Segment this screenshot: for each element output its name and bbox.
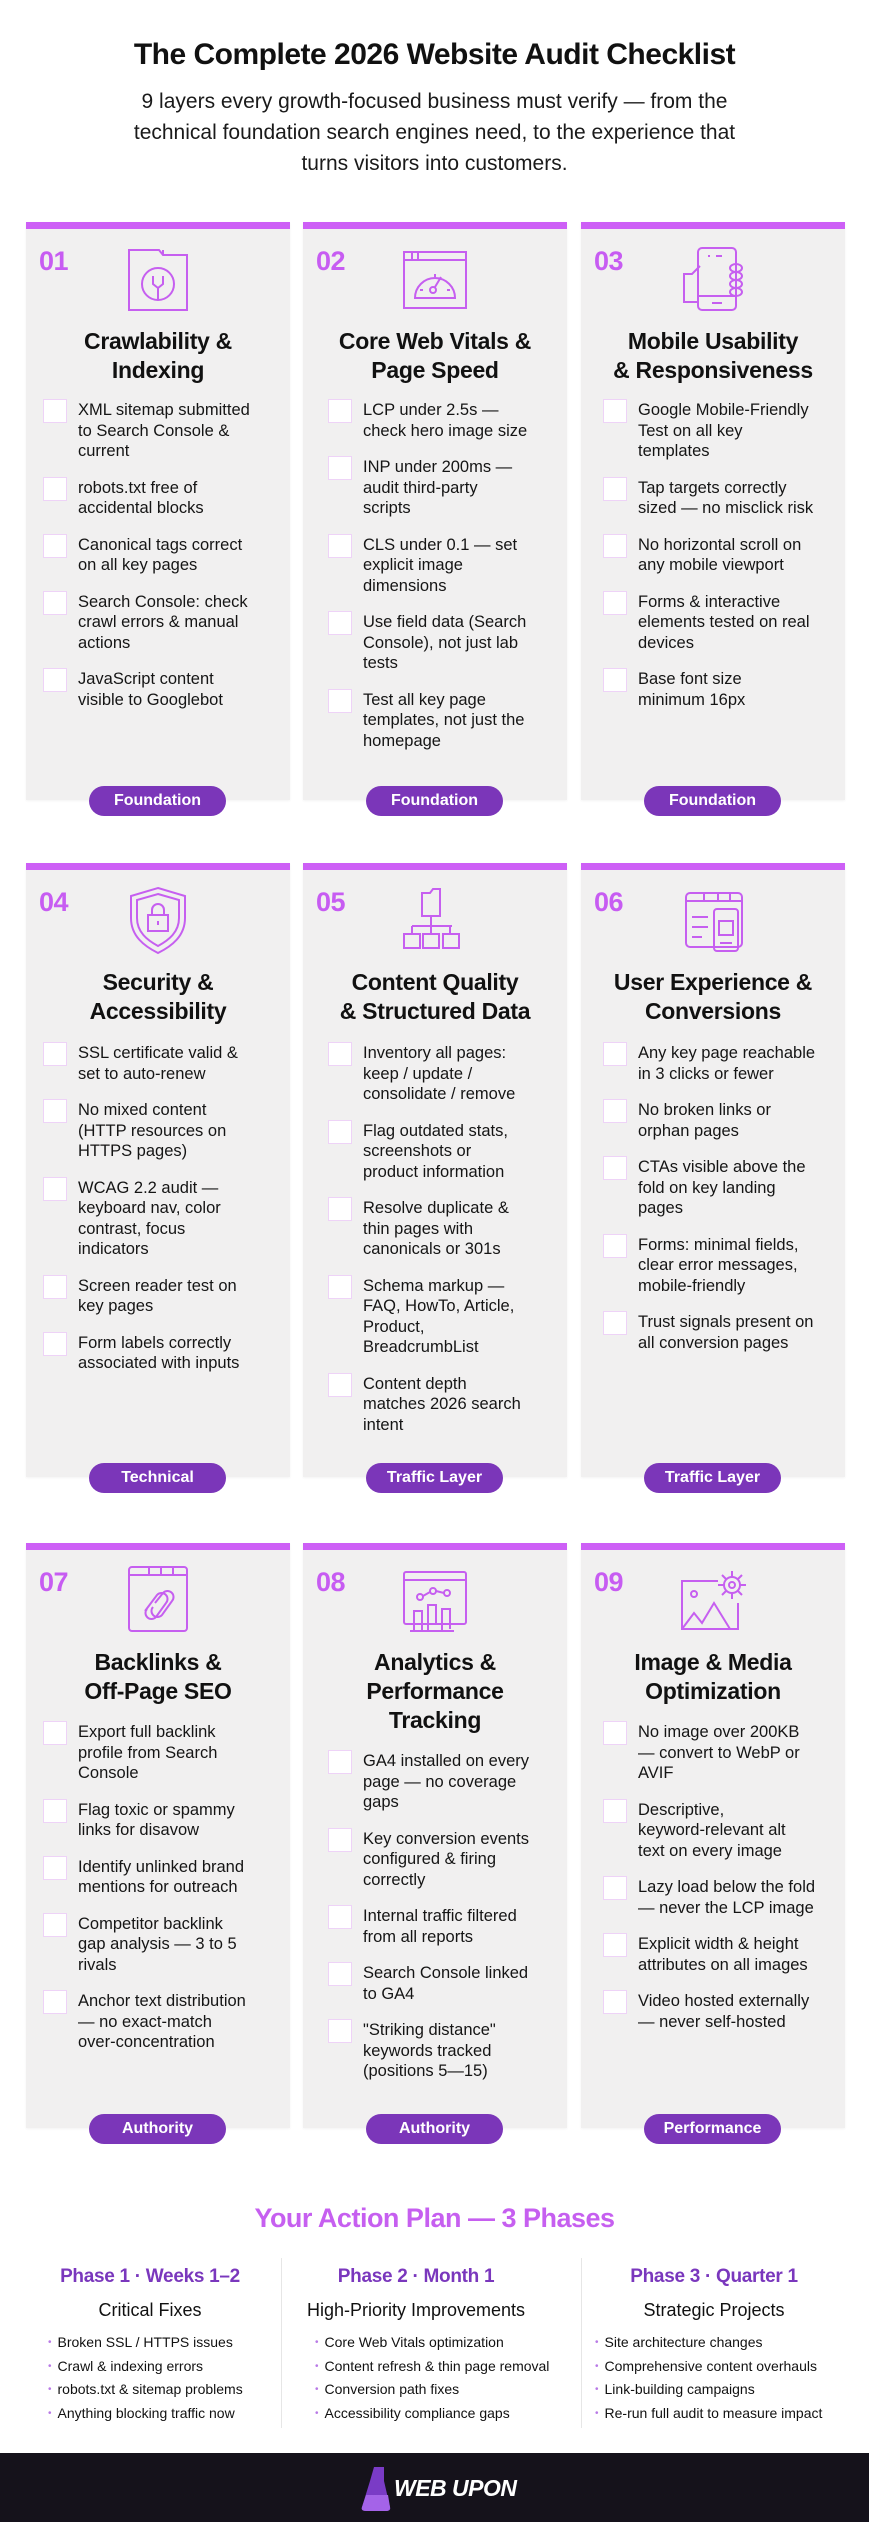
checklist: Console), not just lab xyxy=(363,634,518,652)
badge: Technical xyxy=(121,1469,194,1486)
checklist: associated with inputs xyxy=(78,1354,239,1372)
checklist: accidental blocks xyxy=(78,499,204,517)
checklist: links for disavow xyxy=(78,1821,199,1839)
subtitle: technical foundation search engines need, to the experience that xyxy=(134,121,735,144)
checklist: audit third-party xyxy=(363,478,478,496)
checklist: scripts xyxy=(363,499,411,517)
checklist: devices xyxy=(638,634,694,652)
checklist: LCP under 2.5s — xyxy=(363,401,498,419)
checklist xyxy=(328,1750,529,2080)
checklist: AVIF xyxy=(638,1764,673,1782)
heading: & Responsiveness xyxy=(613,357,813,383)
phase 3: Strategic Projects xyxy=(643,2300,785,2320)
checklist: Key conversion events xyxy=(363,1830,529,1848)
checklist: Tap targets correctly xyxy=(638,478,787,496)
checklist xyxy=(603,399,814,708)
heading: Image & Media xyxy=(634,1649,792,1675)
checklist xyxy=(603,1721,815,2030)
checklist: Lazy load below the fold xyxy=(638,1878,815,1896)
phase 2 bullets: • Conversion path fixes xyxy=(315,2381,459,2397)
heading xyxy=(84,328,232,383)
badge: Foundation xyxy=(669,792,756,809)
icon: image gear xyxy=(681,1571,746,1630)
phase 2 bullets xyxy=(315,2334,549,2421)
panel: 05 content xyxy=(303,863,567,1477)
checklist: dimensions xyxy=(363,576,446,594)
panel: 04 security xyxy=(26,863,290,1477)
checklist: key pages xyxy=(78,1297,153,1315)
checklist: attributes on all images xyxy=(638,1956,808,1974)
phase 3 bullets xyxy=(595,2334,822,2421)
checklist: CLS under 0.1 — set xyxy=(363,536,517,554)
panel: 01 crawlability xyxy=(26,222,290,800)
checklist xyxy=(603,1042,815,1352)
checklist: rivals xyxy=(78,1956,117,1974)
checklist: screenshots or xyxy=(363,1142,471,1160)
phase 3 bullets: • Comprehensive content overhauls xyxy=(595,2358,817,2374)
badge: Foundation xyxy=(114,792,201,809)
checklist: Trust signals present on xyxy=(638,1313,813,1331)
heading xyxy=(84,1649,232,1704)
checklist: page — no coverage xyxy=(363,1772,516,1790)
checklist: GA4 installed on every xyxy=(363,1752,529,1770)
checklist: Schema markup — xyxy=(363,1276,504,1294)
checklist: intent xyxy=(363,1416,403,1434)
checklist: Flag outdated stats, xyxy=(363,1122,508,1140)
title: The Complete 2026 Website Audit Checklist xyxy=(134,38,735,71)
checklist: elements tested on real xyxy=(638,613,810,631)
checklist: Search Console linked xyxy=(363,1964,528,1982)
subtitle: turns visitors into customers. xyxy=(301,152,568,175)
heading xyxy=(340,969,531,1024)
heading: Accessibility xyxy=(90,998,226,1024)
panel: 01 crawlability: 01 xyxy=(39,246,68,276)
checklist: Inventory all pages: xyxy=(363,1044,506,1062)
checklist: Use field data (Search xyxy=(363,613,526,631)
phase 2: Phase 2 · Month 1 xyxy=(338,2266,494,2287)
heading: Analytics & xyxy=(374,1649,496,1675)
checklist: Any key page reachable xyxy=(638,1044,815,1062)
checklist: (HTTP resources on xyxy=(78,1122,226,1140)
checklist: XML sitemap submitted xyxy=(78,401,250,419)
checklist: Resolve duplicate & xyxy=(363,1199,509,1217)
heading: Off-Page SEO xyxy=(84,1678,232,1704)
phase 3 bullets: • Link-building campaigns xyxy=(595,2381,755,2397)
phase 2 xyxy=(307,2266,525,2320)
badge xyxy=(644,786,781,816)
checklist: Search Console: check xyxy=(78,592,248,610)
checklist: set to auto-renew xyxy=(78,1064,206,1082)
heading: Performance xyxy=(366,1678,504,1704)
heading: Security & xyxy=(103,969,213,995)
checklist: keywords tracked xyxy=(363,2042,491,2060)
phase 2 bullets: • Accessibility compliance gaps xyxy=(315,2405,510,2421)
checklist: fold on key landing xyxy=(638,1178,776,1196)
checklist: No mixed content xyxy=(78,1101,206,1119)
checklist: to GA4 xyxy=(363,1984,414,2002)
icon: shield lock xyxy=(130,887,186,954)
checklist: Forms & interactive xyxy=(638,592,780,610)
icon: sitemap xyxy=(403,888,460,949)
checklist: "Striking distance" xyxy=(363,2021,496,2039)
phase 2 bullets: • Core Web Vitals optimization xyxy=(315,2334,504,2350)
checklist: No image over 200KB xyxy=(638,1723,799,1741)
checklist: Video hosted externally xyxy=(638,1992,809,2010)
checklist: sized — no misclick risk xyxy=(638,499,813,517)
checklist: matches 2026 search xyxy=(363,1395,521,1413)
action plan heading: Your Action Plan — 3 Phases xyxy=(254,2203,615,2233)
checklist: configured & firing xyxy=(363,1850,496,1868)
phase 2 bullets: • Content refresh & thin page removal xyxy=(315,2358,549,2374)
icon: folder gear xyxy=(128,249,188,311)
checklist: keyboard nav, color xyxy=(78,1199,221,1217)
panel: 08 analytics: 08 xyxy=(316,1567,345,1597)
badge xyxy=(366,1463,503,1493)
icon: responsive screens xyxy=(685,892,743,952)
heading xyxy=(339,328,531,383)
checklist: current xyxy=(78,442,129,460)
checklist: Flag toxic or spammy xyxy=(78,1800,235,1818)
checklist: Descriptive, xyxy=(638,1800,724,1818)
heading xyxy=(90,969,226,1024)
phase 3: Phase 3 · Quarter 1 xyxy=(630,2266,798,2287)
phase 1: Phase 1 · Weeks 1–2 xyxy=(60,2266,240,2287)
checklist: INP under 200ms — xyxy=(363,458,512,476)
checklist: homepage xyxy=(363,732,441,750)
badge xyxy=(366,2114,503,2144)
heading: Backlinks & xyxy=(94,1649,222,1675)
checklist: keyword-relevant alt xyxy=(638,1821,786,1839)
checklist: visible to Googlebot xyxy=(78,690,223,708)
heading xyxy=(613,328,813,383)
heading: Tracking xyxy=(389,1707,481,1733)
checklist: Google Mobile-Friendly xyxy=(638,401,809,419)
checklist: canonicals or 301s xyxy=(363,1240,501,1258)
checklist: — no exact-match xyxy=(78,2012,212,2030)
badge: Traffic Layer xyxy=(387,1469,482,1486)
checklist: templates, not just the xyxy=(363,711,524,729)
checklist: tests xyxy=(363,654,398,672)
checklist: Internal traffic filtered xyxy=(363,1907,517,1925)
checklist: indicators xyxy=(78,1240,149,1258)
checklist: crawl errors & manual xyxy=(78,613,238,631)
panel: 07 backlinks xyxy=(26,1543,290,2128)
checklist: Test all key page xyxy=(363,690,486,708)
checklist: all conversion pages xyxy=(638,1334,788,1352)
checklist: from all reports xyxy=(363,1928,473,1946)
checklist: minimum 16px xyxy=(638,690,745,708)
checklist: actions xyxy=(78,634,130,652)
icon: phone in hand xyxy=(683,247,743,311)
phase 1 bullets: • Anything blocking traffic now xyxy=(48,2405,235,2421)
checklist: gap analysis — 3 to 5 xyxy=(78,1935,237,1953)
phase 2: High-Priority Improvements xyxy=(307,2300,525,2320)
panel: 08 analytics xyxy=(303,1543,567,2128)
checklist: contrast, focus xyxy=(78,1220,185,1238)
phase 1 xyxy=(60,2266,240,2320)
checklist xyxy=(43,1721,246,2051)
checklist: Console xyxy=(78,1764,139,1782)
badge xyxy=(89,2114,226,2144)
panel: 04 security: 04 xyxy=(39,887,68,917)
panel: 03 mobile: 03 xyxy=(594,246,623,276)
footer xyxy=(0,2453,869,2522)
checklist: to Search Console & xyxy=(78,422,229,440)
heading xyxy=(366,1649,504,1733)
phase 1 bullets xyxy=(48,2334,243,2421)
phase 1: Critical Fixes xyxy=(98,2300,202,2320)
badge xyxy=(366,786,503,816)
panel: 09 image media xyxy=(581,1543,845,2128)
checklist: Identify unlinked brand xyxy=(78,1858,244,1876)
checklist: keep / update / xyxy=(363,1064,472,1082)
logo xyxy=(362,2467,518,2511)
checklist: Forms: minimal fields, xyxy=(638,1236,798,1254)
badge: Authority xyxy=(122,2120,193,2137)
checklist: consolidate / remove xyxy=(363,1085,515,1103)
checklist: Base font size xyxy=(638,670,742,688)
checklist: clear error messages, xyxy=(638,1256,798,1274)
checklist: profile from Search xyxy=(78,1744,217,1762)
checklist: Anchor text distribution xyxy=(78,1992,246,2010)
panel: 02 core web vitals: 02 xyxy=(316,246,345,276)
panel: 05 content: 05 xyxy=(316,887,345,917)
checklist: Canonical tags correct xyxy=(78,536,242,554)
icon: speedometer xyxy=(403,251,467,309)
checklist: Screen reader test on xyxy=(78,1276,237,1294)
panel: 06 user experience xyxy=(581,863,845,1477)
heading: Page Speed xyxy=(371,357,499,383)
badge: Traffic Layer xyxy=(665,1469,760,1486)
checklist: templates xyxy=(638,442,710,460)
checklist: Competitor backlink xyxy=(78,1914,223,1932)
checklist: Product, xyxy=(363,1318,424,1336)
checklist: — never self-hosted xyxy=(638,2012,786,2030)
heading xyxy=(614,969,812,1024)
checklist xyxy=(328,1042,521,1434)
checklist: Explicit width & height xyxy=(638,1935,798,1953)
checklist: JavaScript content xyxy=(78,670,214,688)
heading: Content Quality xyxy=(352,969,518,995)
checklist: FAQ, HowTo, Article, xyxy=(363,1297,514,1315)
icon: flask xyxy=(362,2467,390,2511)
icon: link page xyxy=(128,1566,188,1632)
checklist: SSL certificate valid & xyxy=(78,1044,238,1062)
phase 3 bullets: • Re-run full audit to measure impact xyxy=(595,2405,822,2421)
badge xyxy=(644,1463,781,1493)
panel: 07 backlinks: 07 xyxy=(39,1567,68,1597)
badge: Performance xyxy=(664,2120,761,2137)
checklist: CTAs visible above the xyxy=(638,1158,806,1176)
checklist: pages xyxy=(638,1199,683,1217)
heading: Crawlability & xyxy=(84,328,232,354)
phase 3 bullets: • Site architecture changes xyxy=(595,2334,762,2350)
checklist: text on every image xyxy=(638,1842,782,1860)
phase 1 bullets: • Crawl & indexing errors xyxy=(48,2358,203,2374)
checklist: mentions for outreach xyxy=(78,1878,238,1896)
phase 1 bullets: • Broken SSL / HTTPS issues xyxy=(48,2334,233,2350)
heading: Mobile Usability xyxy=(628,328,798,354)
panel: 02 core web vitals xyxy=(303,222,567,800)
checklist: Content depth xyxy=(363,1374,467,1392)
checklist: robots.txt free of xyxy=(78,478,197,496)
heading: Core Web Vitals & xyxy=(339,328,531,354)
checklist: Export full backlink xyxy=(78,1723,216,1741)
heading: Conversions xyxy=(645,998,781,1024)
heading: User Experience & xyxy=(614,969,812,995)
phase 3 xyxy=(630,2266,798,2320)
checklist: check hero image size xyxy=(363,422,527,440)
checklist: Form labels correctly xyxy=(78,1334,231,1352)
heading: Optimization xyxy=(645,1678,781,1704)
checklist: HTTPS pages) xyxy=(78,1142,187,1160)
heading xyxy=(634,1649,792,1704)
checklist: mobile-friendly xyxy=(638,1276,745,1294)
checklist: correctly xyxy=(363,1870,425,1888)
panel: 06 user experience: 06 xyxy=(594,887,623,917)
checklist: WCAG 2.2 audit — xyxy=(78,1178,218,1196)
checklist: orphan pages xyxy=(638,1122,739,1140)
checklist xyxy=(328,399,527,750)
checklist: No horizontal scroll on xyxy=(638,536,801,554)
badge xyxy=(644,2114,781,2144)
heading: Indexing xyxy=(112,357,204,383)
subtitle: 9 layers every growth-focused business must verify — from the xyxy=(142,90,727,113)
checklist: any mobile viewport xyxy=(638,556,784,574)
checklist: (positions 5—15) xyxy=(363,2062,488,2080)
phase 1 bullets: • robots.txt & sitemap problems xyxy=(48,2381,243,2397)
checklist xyxy=(43,1042,239,1372)
checklist xyxy=(43,399,250,708)
badge: Foundation xyxy=(391,792,478,809)
checklist: — never the LCP image xyxy=(638,1898,814,1916)
checklist: Test on all key xyxy=(638,422,743,440)
checklist: on all key pages xyxy=(78,556,197,574)
checklist: explicit image xyxy=(363,556,463,574)
checklist: — convert to WebP or xyxy=(638,1744,800,1762)
panel: 09 image media: 09 xyxy=(594,1567,623,1597)
checklist: over-concentration xyxy=(78,2033,215,2051)
checklist: thin pages with xyxy=(363,1220,473,1238)
icon: analytics chart xyxy=(403,1571,467,1632)
logo: WEB UPON xyxy=(394,2475,516,2501)
heading: & Structured Data xyxy=(340,998,530,1024)
checklist: in 3 clicks or fewer xyxy=(638,1064,774,1082)
badge xyxy=(89,786,226,816)
checklist: No broken links or xyxy=(638,1101,771,1119)
checklist: BreadcrumbList xyxy=(363,1338,479,1356)
panel: 03 mobile xyxy=(581,222,845,800)
checklist: product information xyxy=(363,1162,504,1180)
badge xyxy=(89,1463,226,1493)
badge: Authority xyxy=(399,2120,470,2137)
subtitle xyxy=(134,90,735,175)
checklist: gaps xyxy=(363,1793,399,1811)
